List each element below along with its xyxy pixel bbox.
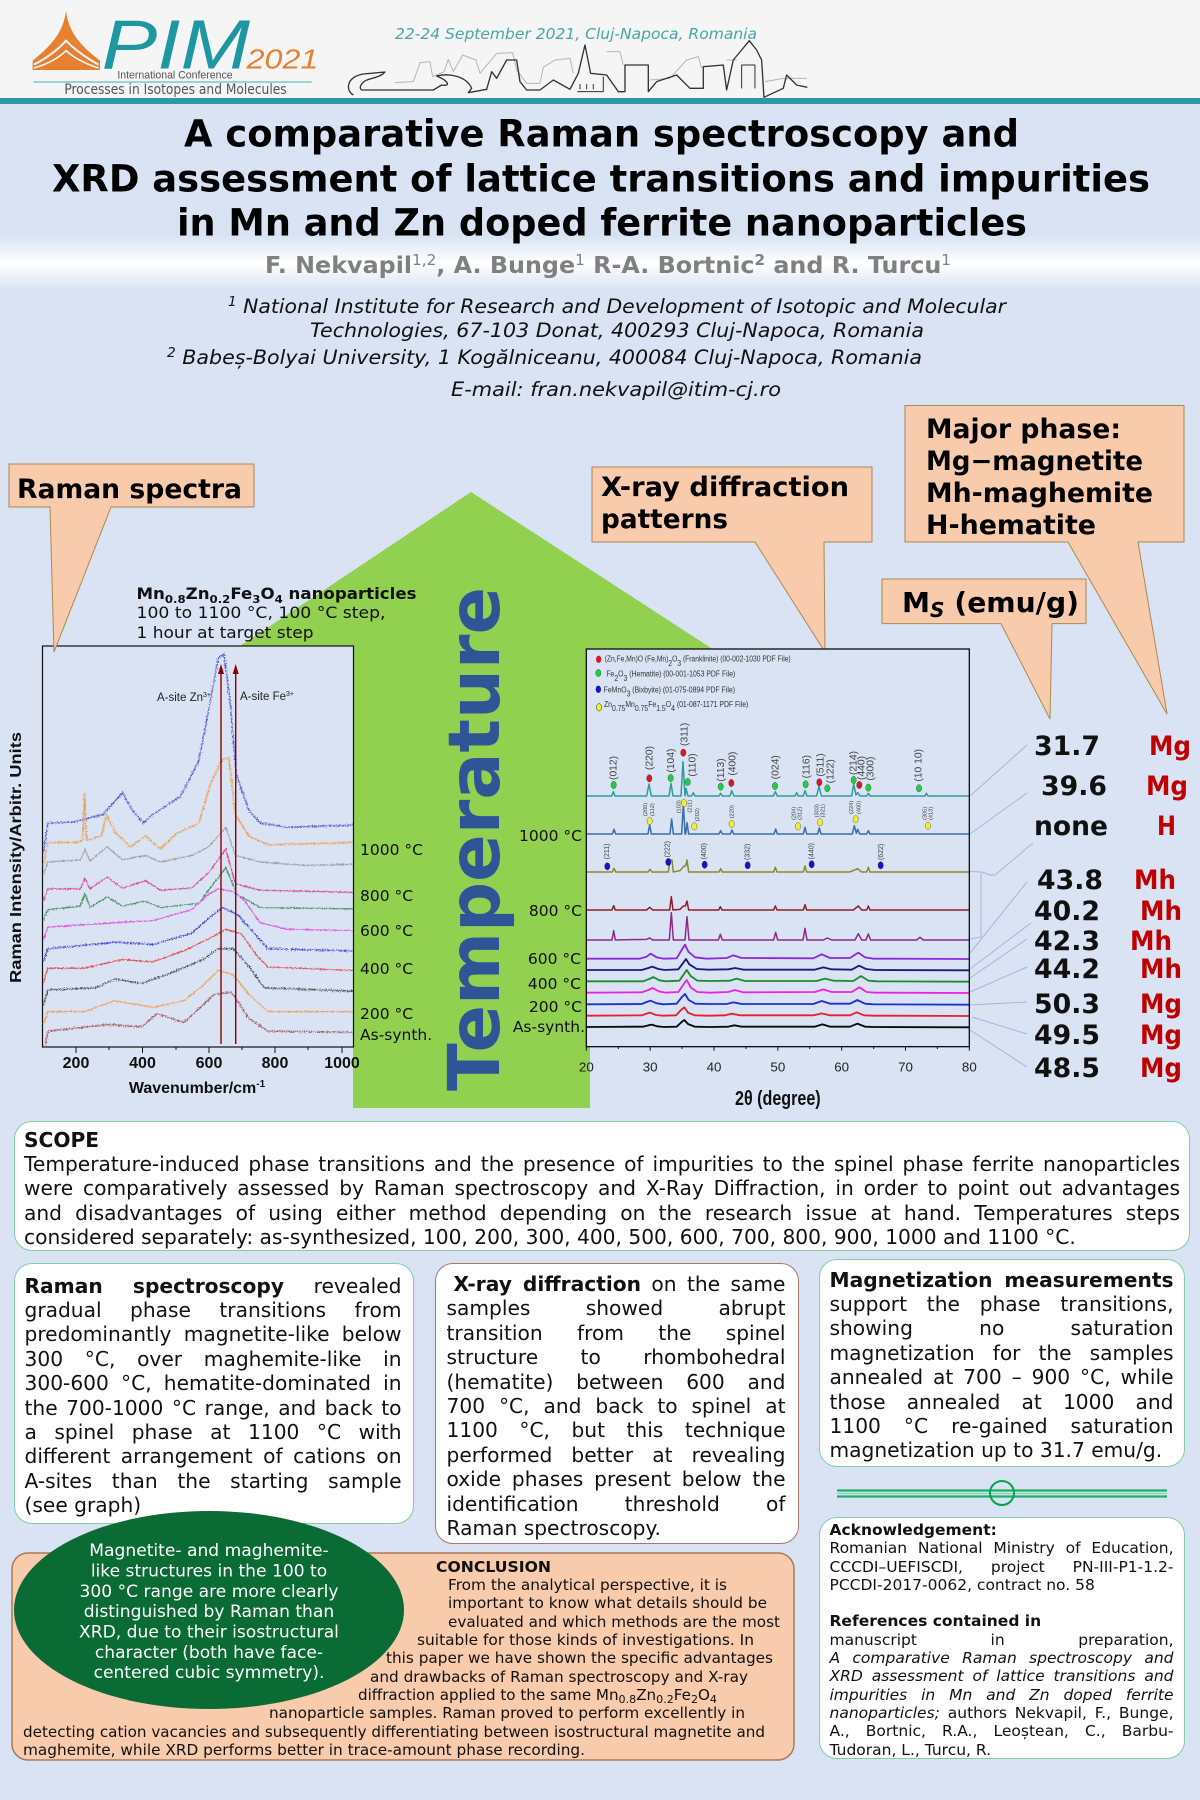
- magnetization values: 43.8: [1037, 865, 1103, 896]
- miller indices: (024): [770, 755, 781, 779]
- xrd text: identification threshold of: [446, 1492, 786, 1516]
- miller indices: (200): [643, 803, 649, 816]
- temperature label: Temperature: [433, 587, 516, 1091]
- acknowledgement text: A comparative Raman spectroscopy and: [830, 1649, 1174, 1667]
- authors: 1,2: [412, 251, 436, 269]
- raman temperature labels: 600 °C: [360, 922, 413, 940]
- magnetization values: 50.3: [1034, 989, 1100, 1020]
- affiliations: Technologies, 67-103 Donat, 400293 Cluj-Napoca, Romania: [310, 319, 924, 342]
- xrd legend: FeMnO: [604, 686, 630, 695]
- xrd legend: 2: [614, 674, 619, 683]
- raman temperature labels: As-synth.: [360, 1026, 432, 1044]
- xrd legend: (Franklinite) (00-002-1030 PDF File): [681, 654, 791, 663]
- sample description: Mn: [136, 585, 163, 603]
- raman x axis labels: 200: [63, 1055, 89, 1072]
- authors: and R. Turcu: [765, 251, 941, 279]
- acknowledgement text: Romanian National Ministry of Education,: [830, 1539, 1174, 1557]
- scope text: were comparatively assessed by Raman spectroscopy and X-Ray Diffraction, in order to point out advantages: [24, 1176, 1180, 1200]
- xrd legend: [596, 654, 791, 713]
- miller indices: (321): [821, 804, 827, 817]
- city skyline: [348, 41, 807, 97]
- miller indices: (104): [666, 749, 677, 773]
- xrd text: samples showed abrupt: [446, 1296, 786, 1320]
- miller indices: (305): [923, 807, 929, 820]
- xrd temperature labels: 1000 °C: [519, 827, 582, 845]
- conclusion text: and drawbacks of Raman spectroscopy and X-ray: [370, 1668, 748, 1686]
- panel: magnetization measurements: [819, 1259, 1185, 1467]
- authors: 1: [575, 251, 585, 269]
- xrd axis tick labels: 80: [962, 1060, 977, 1075]
- miller indices: (112): [650, 803, 656, 816]
- raman x axis labels: 800: [262, 1055, 288, 1072]
- magnetization values: 42.3: [1034, 926, 1100, 957]
- callout: raman spectra: [9, 464, 254, 652]
- xrd text: Raman spectroscopy.: [446, 1516, 661, 1540]
- callout: green ellipse: distinguished by Raman than: [84, 1602, 334, 1622]
- peak labels: A-site Zn: [157, 692, 203, 704]
- conclusion text: diffraction applied to the same Mn: [358, 1686, 616, 1704]
- callout: green ellipse: Magnetite- and maghemite-: [89, 1541, 329, 1561]
- conclusion text: detecting cation vacancies and subsequently differentiating between isostructural magnetite and: [23, 1723, 765, 1741]
- magnetization text: magnetization for the samples: [830, 1341, 1174, 1365]
- callout: green ellipse: 300 °C range are more clearly: [80, 1582, 338, 1602]
- raman text: different arrangement of cations on: [24, 1444, 402, 1468]
- miller indices: (110): [687, 753, 698, 777]
- conclusion text: 2: [691, 1693, 698, 1706]
- acknowledgement text: manuscript in preparation,: [830, 1631, 1174, 1649]
- xrd text: oxide phases present below the: [446, 1467, 786, 1491]
- conference logo: [33, 5, 318, 98]
- magnetization text: support the phase transitions,: [830, 1292, 1174, 1316]
- magnetization text: magnetization up to 31.7 emu/g.: [830, 1438, 1162, 1462]
- affiliations: [167, 295, 1008, 401]
- arrow: A-site Fe: [233, 664, 239, 1044]
- callout: Ms: (emu/g): [945, 586, 1079, 619]
- xrd temperature labels: 600 °C: [528, 950, 581, 968]
- raman text: gradual phase transitions from: [24, 1298, 402, 1322]
- callout: Ms: [882, 579, 1086, 719]
- magnetization text: showing no saturation: [830, 1316, 1174, 1340]
- conclusion text: evaluated and which methods are the most: [448, 1613, 780, 1631]
- phase labels: Mg: [1140, 989, 1182, 1020]
- callout: major phase: Mh-maghemite: [926, 478, 1153, 509]
- raman chart: [8, 646, 360, 1097]
- xrd legend: 3: [624, 674, 628, 683]
- xrd legend: Fe: [648, 700, 657, 709]
- xrd temperature labels: As-synth.: [513, 1018, 585, 1036]
- sample description: O: [260, 585, 275, 603]
- phase labels: Mg: [1149, 731, 1191, 762]
- arrow: A-site Zn: [218, 664, 224, 1044]
- peak labels: [157, 691, 294, 704]
- acknowledgement text: nanoparticles; authors Nekvapil, F., Bunge,: [830, 1704, 1174, 1722]
- phase labels: H: [1157, 811, 1176, 842]
- xrd legend: (01-087-1171 PDF File): [675, 700, 749, 709]
- scope text: and disadvantages of using either method depending on the research issue at hand. Temperatures steps: [24, 1201, 1180, 1225]
- peak labels: 3+: [286, 691, 294, 698]
- xrd text: X-ray diffraction on the same: [454, 1272, 785, 1296]
- affiliations: Babeș-Bolyai University, 1 Kogălniceanu, 400084 Cluj-Napoca, Romania: [176, 346, 922, 369]
- miller indices: (214): [849, 751, 860, 775]
- phase labels: Mg: [1146, 771, 1188, 802]
- conclusion text: important to know what details should be: [448, 1594, 767, 1612]
- connector lines: [970, 745, 1033, 1067]
- sample description: 1 hour at target step: [136, 624, 314, 642]
- xrd text: 700 °C, and back to spinel at: [446, 1394, 786, 1418]
- sample description: nanoparticles: [283, 585, 416, 603]
- affiliations: E-mail: fran.nekvapil@itim-cj.ro: [451, 378, 781, 401]
- scope text: considered separately: as-synthesized, 100, 200, 300, 400, 500, 600, 700, 800, 900, 1000 and 1100 °C.: [24, 1225, 1076, 1249]
- xrd axis tick labels: [579, 1060, 977, 1075]
- xrd legend: 0.75: [612, 704, 626, 713]
- miller indices: (440): [857, 756, 868, 780]
- acknowledgement text: Tudoran, L., Turcu, R.: [830, 1741, 991, 1759]
- miller indices: (116): [801, 755, 812, 778]
- xrd axis title: 2θ (degree): [735, 1087, 821, 1110]
- phase labels: [1130, 731, 1191, 1084]
- magnetization values: 49.5: [1034, 1020, 1100, 1051]
- phase labels: Mh: [1140, 896, 1182, 927]
- panel: conclusion: [12, 1553, 794, 1760]
- raman temperature labels: 400 °C: [360, 960, 413, 978]
- magnetization text: [830, 1268, 1174, 1462]
- magnetization values: none: [1034, 811, 1108, 842]
- miller indices: (224): [849, 801, 855, 814]
- sample description: 3: [252, 593, 260, 606]
- panel: scope: [14, 1121, 1190, 1251]
- title: XRD assessment of lattice transitions and impurities: [52, 158, 1150, 200]
- xrd chart: [513, 649, 977, 1110]
- magnetization text: 1100 °C re-gained saturation: [830, 1414, 1174, 1438]
- conclusion text: 0.8: [619, 1693, 636, 1706]
- raman x axis labels: -1: [256, 1079, 266, 1090]
- miller indices: (220): [729, 805, 735, 818]
- miller indices: (220): [645, 746, 656, 770]
- xrd legend: (Bixbyite) (01-075-0894 PDF File): [630, 686, 735, 695]
- raman x axis labels: Wavenumber/cm: [129, 1080, 256, 1097]
- sample description: 0.8: [165, 593, 186, 606]
- sample description: 0.2: [210, 593, 230, 606]
- phase labels: Mg: [1140, 1020, 1182, 1051]
- magnetization values: 40.2: [1034, 896, 1100, 927]
- callout: green ellipse: [14, 1511, 404, 1709]
- acknowledgement text: Acknowledgement: References contained in: [830, 1521, 1041, 1630]
- callout: major phase: [905, 406, 1184, 714]
- miller indices: (211): [604, 844, 611, 859]
- conference logo: Processes in Isotopes and Molecules: [64, 82, 287, 98]
- xrd temperature labels: [513, 827, 585, 1036]
- xrd text: 1100 °C, but this technique: [446, 1418, 786, 1442]
- miller indices: (303): [814, 804, 820, 817]
- raman text: the 700-1000 °C range, and back to: [24, 1396, 402, 1420]
- miller indices: (511): [815, 753, 826, 777]
- miller indices: (113): [716, 758, 727, 782]
- xrd legend: O: [618, 669, 624, 678]
- conclusion text: 4: [710, 1693, 717, 1706]
- miller indices: (222): [665, 841, 672, 857]
- xrd text: transition from the spinel: [446, 1321, 786, 1345]
- miller indices: (400): [857, 801, 863, 814]
- xrd legend: (Hematite) (00-001-1053 PDF File): [627, 669, 736, 678]
- raman x axis labels: 400: [129, 1055, 156, 1072]
- conclusion heading: CONCLUSION: [436, 1558, 551, 1576]
- miller indices: (122): [825, 759, 836, 783]
- affiliations: 1: [228, 295, 237, 310]
- affiliations: 2: [167, 346, 176, 361]
- title: A comparative Raman spectroscopy and: [184, 112, 1019, 156]
- xrd text: [446, 1272, 786, 1540]
- phase labels: Mh: [1134, 865, 1176, 896]
- phase labels: Mh: [1130, 926, 1172, 957]
- magnetization text: Magnetization measurements: [830, 1268, 1174, 1292]
- conclusion text: suitable for those kinds of investigations. In: [417, 1631, 754, 1649]
- xrd axis tick labels: 30: [643, 1060, 658, 1075]
- sample description: Zn: [186, 585, 210, 603]
- xrd text: performed better at revealing: [446, 1443, 786, 1467]
- callout: x-ray diffraction patterns: X-ray diffraction: [601, 472, 849, 503]
- xrd legend: 3: [677, 659, 682, 668]
- sample description: [136, 585, 416, 642]
- callout: green ellipse: XRD, due to their isostructural: [79, 1622, 339, 1642]
- sample description: Fe: [230, 585, 252, 603]
- callout: Ms: S: [930, 598, 945, 622]
- acknowledgement text: A., Bortnic, R.A., Leoștean, C., Barbu-: [830, 1722, 1174, 1740]
- callout: major phase: Mg−magnetite: [926, 446, 1143, 477]
- acknowledgement text: CCCDI–UEFISCDI, project PN-III-P1-1.2-: [830, 1558, 1174, 1576]
- magnetization text: those annealed at 1000 and: [830, 1390, 1174, 1414]
- miller indices: (440): [809, 843, 816, 859]
- scope text: Temperature-induced phase transitions and the presence of impurities to the spinel phase ferrite nanoparticles: [24, 1152, 1180, 1176]
- xrd axis tick labels: 40: [707, 1060, 721, 1075]
- xrd legend: 4: [671, 704, 675, 713]
- callout: raman spectra: Raman spectra: [17, 474, 242, 505]
- xrd axis tick labels: 60: [834, 1060, 849, 1075]
- acknowledgement text: XRD assessment of lattice transitions and: [830, 1667, 1174, 1685]
- xrd temperature labels: 400 °C: [528, 975, 581, 993]
- magnetization values: 48.5: [1034, 1053, 1100, 1084]
- xrd temperature labels: 800 °C: [529, 902, 582, 920]
- peak labels: A-site Fe: [240, 691, 286, 703]
- raman text: a spinel phase at 1100 °C with: [24, 1420, 402, 1444]
- acknowledgement text: [828, 1521, 1174, 1759]
- conclusion text: maghemite, while XRD performs better in trace-amount phase recording.: [23, 1741, 585, 1759]
- xrd legend: Zn: [604, 700, 613, 709]
- xrd text: structure to rhombohedral: [446, 1345, 786, 1369]
- callout: major phase: Major phase:: [926, 414, 1121, 445]
- conclusion text: [23, 1576, 780, 1759]
- conclusion text: nanoparticle samples. Raman proved to perform excellently in: [269, 1704, 745, 1722]
- xrd legend: O: [666, 700, 671, 709]
- miller indices: (103): [676, 800, 682, 813]
- conference logo: International Conference: [117, 70, 233, 82]
- phase markers: [605, 749, 931, 870]
- xrd legend: 2: [668, 659, 673, 668]
- xrd axis tick labels: 70: [898, 1060, 913, 1075]
- acknowledgement text: PCCDI-2017-0062, contract no. 58: [830, 1576, 1095, 1594]
- xrd legend: 0.75: [635, 704, 649, 713]
- miller indices: [604, 723, 935, 860]
- conclusion text: Fe: [674, 1686, 691, 1704]
- miller indices: (10 10): [914, 749, 925, 782]
- authors: F. Nekvapil: [265, 251, 410, 279]
- magnetization values: 31.7: [1034, 731, 1100, 762]
- raman x axis labels: 600: [196, 1055, 222, 1072]
- miller indices: (312): [797, 807, 803, 820]
- phase labels: Mg: [1140, 1053, 1182, 1084]
- xrd axis tick labels: 20: [579, 1060, 594, 1075]
- panel: raman spectroscopy: [14, 1263, 414, 1524]
- raman x axis labels: 1000: [324, 1055, 360, 1072]
- miller indices: (012): [609, 756, 620, 780]
- xrd legend: 3: [627, 690, 631, 699]
- miller indices: (300): [865, 757, 876, 781]
- conclusion text: From the analytical perspective, it is: [448, 1576, 727, 1594]
- miller indices: (204): [791, 807, 797, 820]
- callout: green ellipse: centered cubic symmetry).: [94, 1663, 324, 1683]
- raman text: A-sites than the starting sample: [24, 1469, 402, 1493]
- raman text: 300 °C, over maghemite-like in: [24, 1347, 402, 1371]
- raman text: [24, 1274, 402, 1517]
- conference logo: PIM: [102, 5, 251, 83]
- panel: x-ray diffraction: [435, 1263, 799, 1544]
- raman text: Raman spectroscopy revealed: [24, 1274, 402, 1298]
- callout: green ellipse: character (both have face-: [95, 1643, 323, 1663]
- sample description: 100 to 1100 °C, 100 °C step,: [136, 604, 386, 622]
- authors: 1: [941, 251, 951, 269]
- xrd traces: [586, 762, 969, 1027]
- authors: , A. Bunge: [436, 251, 575, 279]
- raman text: 300-600 °C, hematite-dominated in: [24, 1371, 402, 1395]
- panel: acknowledgement and references: [819, 1517, 1185, 1759]
- temperature arrow: [234, 492, 714, 1108]
- xrd legend: Mn: [625, 700, 635, 709]
- divider ornament: [837, 1481, 1167, 1505]
- miller indices: (311): [680, 723, 691, 746]
- raman text: predominantly magnetite-like below: [24, 1322, 402, 1346]
- raman temperature labels: 800 °C: [360, 887, 413, 905]
- raman temperature labels: [360, 841, 432, 1044]
- title: in Mn and Zn doped ferrite nanoparticles: [177, 202, 1027, 244]
- miller indices: (413): [929, 807, 935, 820]
- conclusion text: this paper we have shown the specific advantages: [386, 1649, 773, 1667]
- peak labels: 3+: [203, 692, 211, 699]
- callout: major phase: H-hematite: [926, 510, 1096, 541]
- raman text: (see graph): [24, 1493, 141, 1517]
- raman x axis labels: [63, 1055, 360, 1097]
- callout: Ms: M: [902, 586, 930, 619]
- xrd axis tick labels: 50: [770, 1060, 785, 1075]
- miller indices: (622): [878, 844, 885, 860]
- xrd legend: Fe: [606, 669, 616, 678]
- magnetization values: [1034, 731, 1108, 1084]
- phase labels: Mh: [1140, 954, 1182, 985]
- raman temperature labels: 1000 °C: [360, 841, 423, 859]
- scope text: [24, 1128, 1180, 1249]
- affiliations: National Institute for Research and Development of Isotopic and Molecular: [237, 295, 1008, 318]
- xrd temperature labels: 200 °C: [529, 998, 582, 1016]
- miller indices: (202): [695, 808, 701, 821]
- xrd legend: O: [672, 654, 677, 663]
- xrd legend: 1.5: [656, 704, 666, 713]
- raman y axis label: Raman Intensity/Arbitr. Units: [8, 732, 25, 983]
- conference logo: 2021: [245, 43, 318, 74]
- conclusion text: O: [698, 1686, 710, 1704]
- header banner: [0, 0, 1200, 104]
- miller indices: (332): [744, 844, 751, 860]
- magnetization text: annealed at 700 – 900 °C, while: [830, 1365, 1174, 1389]
- callout: x-ray diffraction patterns: [592, 467, 872, 652]
- acknowledgement text: impurities in Mn and Zn doped ferrite: [830, 1686, 1174, 1704]
- magnetization values: 44.2: [1034, 954, 1100, 985]
- xrd text: (hematite) between 600 and: [446, 1370, 786, 1394]
- raman temperature labels: 200 °C: [360, 1005, 413, 1023]
- authors: R-A. Bortnic: [585, 251, 754, 279]
- callout: green ellipse: like structures in the 100 to: [91, 1562, 327, 1582]
- conclusion text: 0.2: [656, 1693, 674, 1706]
- miller indices: (400): [701, 843, 708, 859]
- scope text: SCOPE: [24, 1128, 99, 1152]
- xrd legend: (Zn,Fe,Mn)O (Fe,Mn): [605, 654, 681, 663]
- raman spectra traces: [43, 654, 353, 1047]
- magnetization values: 39.6: [1041, 771, 1107, 802]
- title: [52, 112, 1150, 244]
- miller indices: (211): [688, 800, 694, 813]
- conference date: 22-24 September 2021, Cluj-Napoca, Romania: [395, 25, 757, 43]
- callout: x-ray diffraction patterns: patterns: [601, 504, 728, 535]
- conclusion text: Zn: [636, 1686, 656, 1704]
- miller indices: (400): [728, 752, 739, 776]
- authors: 2: [754, 251, 765, 269]
- sample description: 4: [275, 593, 283, 606]
